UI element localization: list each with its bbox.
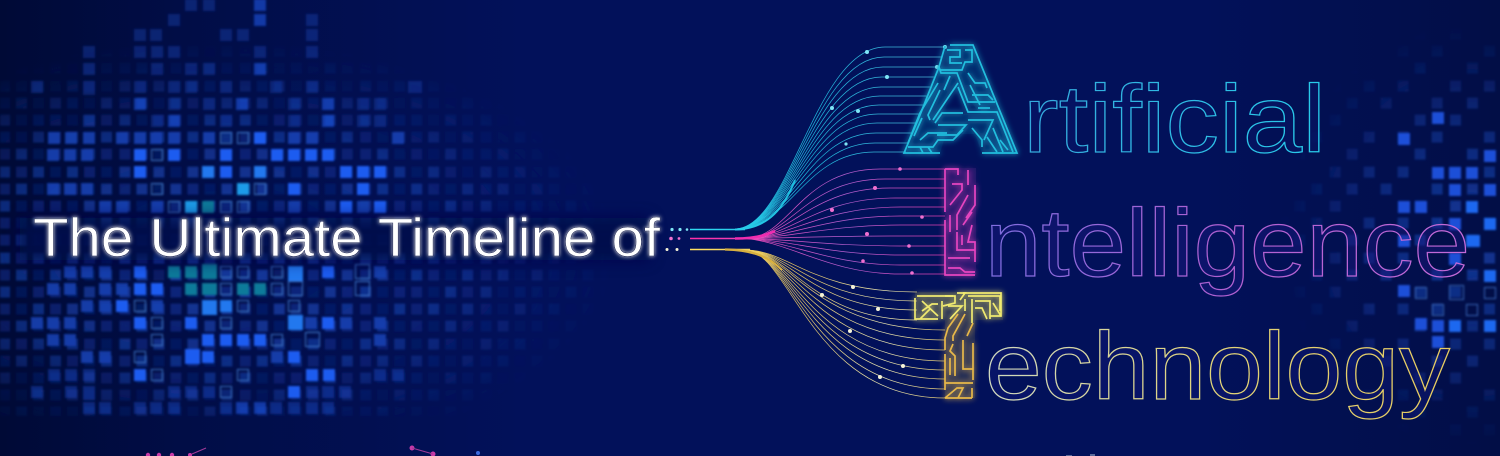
circuit letter I xyxy=(945,168,976,275)
circuit letter A xyxy=(904,45,1017,153)
title: The Ultimate Timeline of xyxy=(33,208,661,268)
right pixel grid xyxy=(1298,46,1498,428)
circuit letter T xyxy=(915,292,1003,398)
magenta connector lines xyxy=(690,169,945,274)
cropped icons along bottom edge xyxy=(146,446,1095,456)
yellow connector lines xyxy=(690,250,945,398)
magenta nodes xyxy=(669,167,924,275)
cyan connector lines xyxy=(690,47,945,230)
heading outline: Artificial: rtificial xyxy=(1023,66,1326,173)
heading outline: Intelligence: ntelligence xyxy=(985,190,1470,297)
heading outline: Technology: echnology xyxy=(985,313,1450,420)
cyan nodes xyxy=(670,45,947,231)
left pixel grid xyxy=(0,0,575,416)
yellow nodes xyxy=(666,248,905,379)
